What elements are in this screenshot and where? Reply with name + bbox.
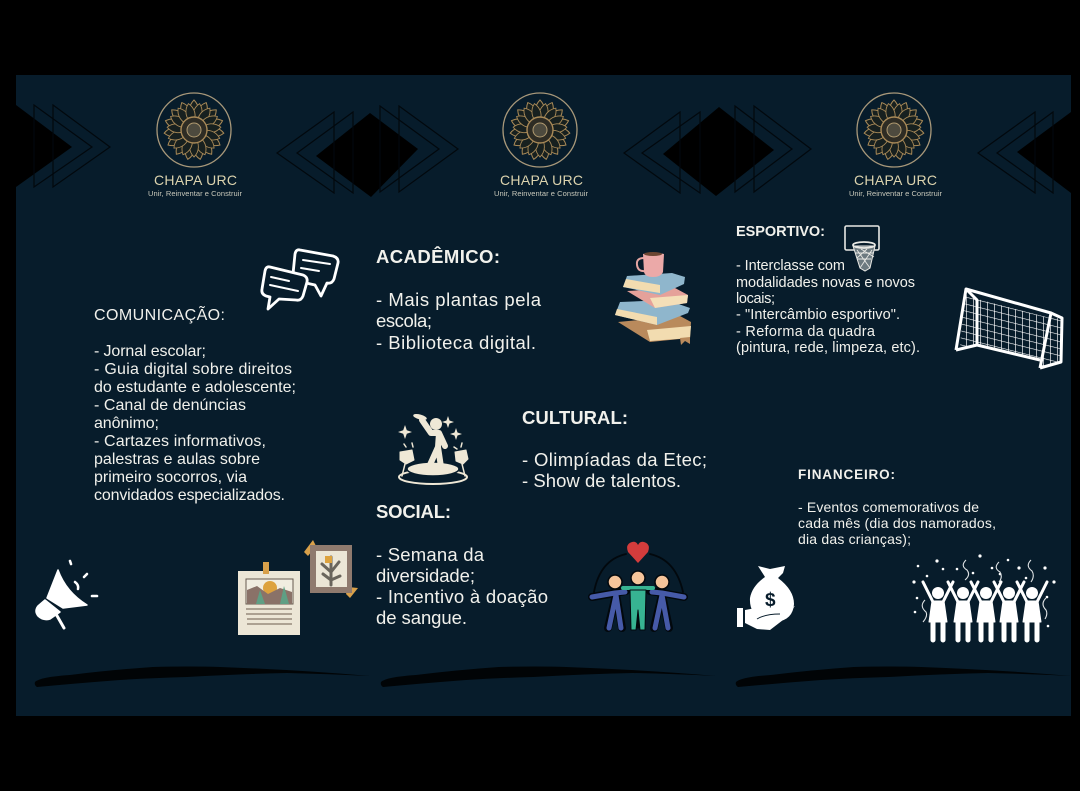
text block: esportivo	[736, 224, 920, 356]
text block: financeiro: dia das crianças);	[798, 531, 911, 547]
icon: basketball hoop	[845, 226, 879, 271]
heading: social: SOCIAL:	[376, 501, 451, 522]
brush stroke 1	[35, 666, 370, 687]
icon: soccer goal	[956, 289, 1062, 368]
text block: cultural: - Show de talentos.	[522, 470, 681, 491]
icon: performer on stage	[398, 413, 468, 484]
background panel	[16, 75, 1071, 716]
text block: social	[376, 501, 548, 628]
text block: esportivo: - Reforma da quadra	[736, 324, 876, 340]
icon: people under heart	[592, 542, 684, 630]
icon: celebrating crowd	[912, 554, 1056, 640]
text block: cultural: - Olimpíadas da Etec;	[522, 449, 707, 470]
text block: financeiro: - Eventos comemorativos de	[798, 499, 979, 515]
text block: social: - Incentivo à doação	[376, 586, 548, 607]
text block: esportivo: locais;	[736, 291, 775, 307]
text block: comunicação: anônimo;	[94, 415, 159, 432]
text block: acadêmico: escola;	[376, 310, 432, 331]
heading: acadêmico: ACADÊMICO:	[376, 246, 500, 267]
brush stroke 2	[381, 666, 716, 687]
text block: comunicação	[94, 304, 296, 504]
text block: social: diversidade;	[376, 565, 475, 586]
text block: comunicação: - Guia digital sobre direitos	[94, 361, 292, 378]
logo 2	[494, 93, 588, 198]
text block: esportivo: modalidades novas e novos	[736, 275, 915, 291]
text block: comunicação: convidados especializados.	[94, 487, 285, 504]
brush stroke 3	[736, 666, 1071, 687]
heading: comunicação: COMUNICAÇÃO:	[94, 304, 225, 324]
heading: financeiro: FINANCEIRO:	[798, 467, 895, 482]
text block: cultural	[522, 407, 707, 491]
text block: esportivo: - "Intercâmbio esportivo".	[736, 307, 900, 323]
icon: speech bubbles	[262, 250, 338, 309]
text block: social: de sangue.	[376, 607, 467, 628]
text block: comunicação: primeiro socorros, via	[94, 469, 247, 486]
text block: financeiro	[798, 467, 996, 547]
text block: comunicação: palestras e aulas sobre	[94, 451, 260, 468]
text block: acadêmico: - Mais plantas pela	[376, 289, 542, 310]
icon: framed flower	[304, 540, 358, 598]
logo 3: Unir, Reinventar e Construir	[849, 189, 942, 198]
logo 1: CHAPA URC	[154, 172, 237, 188]
heading: cultural: CULTURAL:	[522, 407, 628, 428]
logo 2: Unir, Reinventar e Construir	[494, 189, 588, 198]
icon: hand holding money bag	[737, 566, 795, 630]
text block: comunicação: do estudante e adolescente;	[94, 379, 296, 396]
text block: esportivo: (pintura, rede, limpeza, etc).	[736, 340, 920, 356]
text block: financeiro: cada mês (dia dos namorados,	[798, 515, 996, 531]
logo 3: CHAPA URC	[854, 172, 937, 188]
icon: books and mug	[615, 252, 691, 345]
icon: hand holding money bag: $	[765, 590, 776, 611]
text block: acadêmico	[376, 246, 542, 353]
icon: megaphone	[36, 561, 97, 628]
logo 2: CHAPA URC	[500, 172, 583, 188]
text block: comunicação: - Jornal escolar;	[94, 343, 206, 360]
text block: comunicação: - Cartazes informativos,	[94, 433, 266, 450]
text block: comunicação: - Canal de denúncias	[94, 397, 246, 414]
icon: pinned landscape note	[238, 562, 300, 635]
decorative diamonds and chevrons	[16, 105, 1071, 197]
text block: acadêmico: - Biblioteca digital.	[376, 332, 536, 353]
text block: esportivo: - Interclasse com	[736, 258, 845, 274]
logo 1: Unir, Reinventar e Construir	[148, 189, 242, 198]
logo 3	[849, 93, 942, 198]
text block: social: - Semana da	[376, 544, 485, 565]
logo 1	[148, 93, 242, 198]
heading: esportivo: ESPORTIVO:	[736, 224, 825, 240]
